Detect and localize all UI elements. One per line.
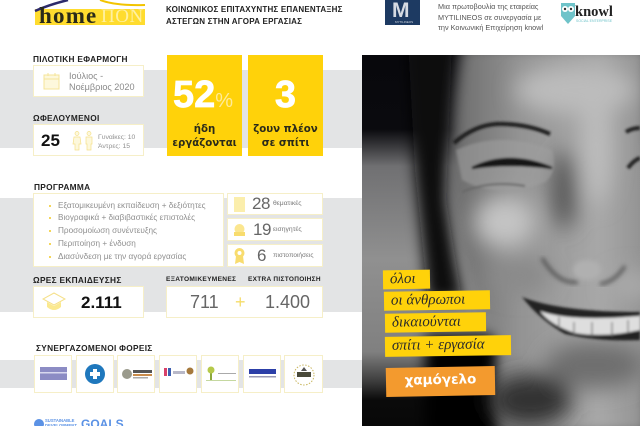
smile <box>522 297 640 340</box>
facial shading <box>475 66 640 426</box>
dates <box>69 71 135 92</box>
partner logo 5 <box>201 355 239 393</box>
initiative text: την Κοινωνική Επιχείρηση knowl <box>438 23 543 32</box>
programme items: Προσομοίωση συνέντευξης <box>58 226 157 235</box>
heading: partners: ΣΥΝΕΡΓΑΖΟΜΕΝΟΙ ΦΟΡΕΙΣ <box>36 343 153 353</box>
hair and shadow <box>408 40 520 426</box>
stat card: 52% <box>167 55 242 156</box>
logo: knowl: knowl <box>575 4 613 20</box>
stat: 19 trainers: 19 <box>253 220 271 239</box>
slogan line: σπίτι + εργασία <box>385 335 511 357</box>
icon: people <box>72 131 92 150</box>
stat card: 3: σε σπίτι <box>262 138 309 149</box>
stat card: 3: 3 <box>275 74 296 116</box>
initiative text <box>438 2 543 32</box>
partner logo 7 <box>284 355 323 393</box>
stat card: 52%: ήδη <box>194 124 215 135</box>
heading: training hours: ΩΡΕΣ ΕΚΠΑΙΔΕΥΣΗΣ <box>33 275 122 285</box>
stat: 19 trainers <box>227 218 323 241</box>
panel: programme list <box>33 193 224 267</box>
stat card: 3 <box>248 55 323 156</box>
stat: 6 certifications <box>227 244 323 267</box>
logo: homeΠΟΝ <box>34 0 146 28</box>
panel: hours breakdown: + <box>235 292 246 312</box>
stat: 19 trainers: εισηγητές <box>273 226 302 233</box>
heading: extra certification: EXTRA ΠΙΣΤΟΠΟΙΗΣΗ <box>248 276 321 283</box>
slogan line: οι άνθρωποι: οι άνθρωποι <box>391 292 465 309</box>
panel: hours breakdown <box>166 286 323 318</box>
title: ΚΟΙΝΩΝΙΚΟΣ ΕΠΙΤΑΧΥΝΤΗΣ ΕΠΑΝΕΝΤΑΞΗΣ <box>166 5 343 14</box>
slogan line: οι άνθρωποι <box>384 290 490 311</box>
stat: 28 topics: θεματικές <box>273 200 302 207</box>
eye area <box>454 124 640 192</box>
panel: pilot dates <box>33 65 144 97</box>
slogan line: δικαιούνται <box>385 312 486 333</box>
number: 25: 25 <box>41 131 60 150</box>
grey background band: top <box>0 70 362 148</box>
panel: hours breakdown: 1.400 <box>265 292 310 312</box>
partner logo 3 <box>117 355 155 393</box>
icon: calendar <box>44 73 60 90</box>
panel: training hours <box>33 286 144 318</box>
logo: knowl <box>561 3 613 24</box>
icon: graduation cap <box>42 292 66 310</box>
photo: smiling woman <box>362 55 640 426</box>
slogan line: σπίτι + εργασία: σπίτι + εργασία <box>392 336 485 354</box>
logo: sustainable development goals: SUSTAINABLE <box>45 418 74 423</box>
logo: homeΠΟΝ: home <box>39 3 97 28</box>
logo: sustainable development goals <box>34 417 124 426</box>
badge: χαμόγελο <box>386 366 495 397</box>
programme items: Διασύνδεση με την αγορά εργασίας <box>58 252 186 261</box>
stat: 28 topics: 28 <box>252 194 270 213</box>
gender split <box>98 134 135 150</box>
title <box>166 5 343 26</box>
heading: programme: ΠΡΟΓΡΑΜΜΑ <box>34 182 90 192</box>
dates: Νοέμβριος 2020 <box>69 82 135 92</box>
gender split: Άντρες: 15 <box>98 143 130 150</box>
dates: Ιούλιος - <box>69 71 103 81</box>
heading: pilot: ΠΙΛΟΤΙΚΗ ΕΦΑΡΜΟΓΗ <box>33 54 128 64</box>
partner logo 1 <box>34 355 72 393</box>
gender split: Γυναίκες: 10 <box>98 134 135 141</box>
heading: beneficiaries: ΩΦΕΛΟΥΜΕΝΟΙ <box>33 113 100 123</box>
slogan line: όλοι: όλοι <box>390 271 416 287</box>
face <box>452 45 640 426</box>
partner logo 4 <box>159 355 197 393</box>
partner logo 6 <box>243 355 281 393</box>
badge: χαμόγελο: χαμόγελο <box>404 371 476 389</box>
stat: 6 certifications: 6 <box>257 246 266 265</box>
number: 2.111: 2.111 <box>81 293 122 312</box>
logo: Mytilineos <box>385 0 420 25</box>
stat card: 3: ζουν πλέον <box>253 124 318 135</box>
stat card: 52%: εργάζονται <box>172 138 237 149</box>
programme items <box>49 201 206 261</box>
logo: knowl: SOCIAL ENTERPRISE <box>576 19 612 23</box>
initiative text: Μια πρωτοβουλία της εταιρείας <box>438 2 538 11</box>
logo: Mytilineos: MYTILINEOS <box>395 20 413 24</box>
partner logo 2 <box>76 355 114 393</box>
panel: beneficiaries <box>33 124 144 156</box>
programme items: Περιποίηση + ένδυση <box>58 239 136 248</box>
stat: 6 certifications: πιστοποιήσεις <box>273 252 314 259</box>
panel: hours breakdown: 711 <box>190 292 219 312</box>
programme items: Βιογραφικά + διαβιβαστικές επιστολές <box>58 213 195 222</box>
grey background band: middle <box>0 198 362 312</box>
nose <box>542 258 625 284</box>
initiative text: MYTILINEOS σε συνεργασία με <box>438 12 541 22</box>
heading: individual hours: ΕΞΑΤΟΜΙΚΕΥΜΕΝΕΣ <box>166 276 236 283</box>
grey background band: partners <box>0 360 362 388</box>
slogan line: όλοι <box>383 270 430 289</box>
stat: 28 topics <box>227 193 323 215</box>
title: ΑΣΤΕΓΩΝ ΣΤΗΝ ΑΓΟΡΑ ΕΡΓΑΣΙΑΣ <box>166 16 302 26</box>
programme items: Εξατομικευμένη εκπαίδευση + δεξιότητες <box>58 201 206 210</box>
logo: homeΠΟΝ: ΠΟΝ <box>101 6 144 27</box>
stat card: 52%: 52% <box>173 74 233 116</box>
slogan line: δικαιούνται: δικαιούνται <box>392 314 461 331</box>
